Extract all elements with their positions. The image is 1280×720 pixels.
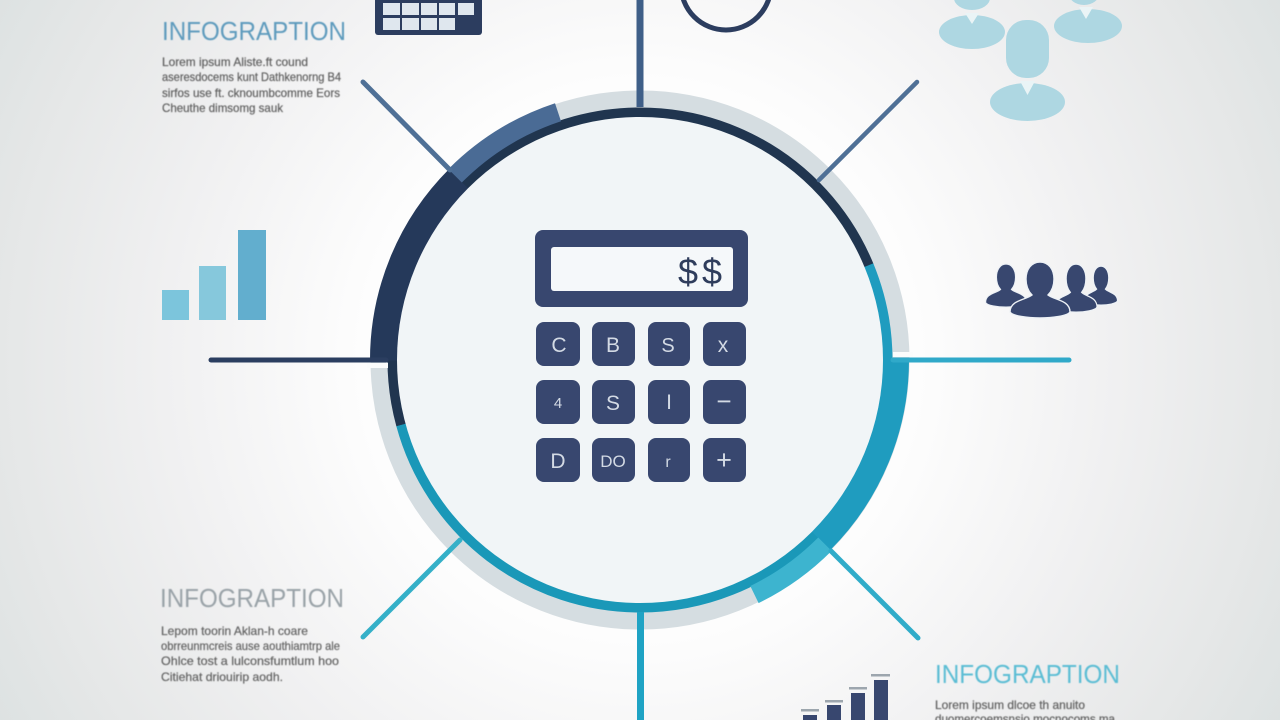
calculator key labels: [550, 334, 732, 475]
body: Lorem ipsum dlcoe th anuito: [935, 698, 1085, 712]
icon: top ring: [681, 0, 771, 30]
calculator key labels: −: [716, 386, 732, 416]
calculator key labels: I: [666, 391, 672, 414]
body: obrreunmcreis ause aouthiamtrp ale: [161, 639, 340, 653]
central ring: [271, 0, 1009, 720]
text block: top left: [162, 16, 346, 115]
calculator key labels: 4: [554, 395, 562, 412]
heading: INFOGRAPTION: [160, 583, 344, 613]
calculator key labels: B: [606, 334, 620, 357]
calculator keys: [536, 322, 746, 482]
body: Ohlce tost a lulconsfumtlum hoo: [161, 654, 339, 668]
body: aseresdocems kunt Dathkenorng B4: [162, 70, 341, 84]
body: sirfos use ft. cknoumbcomme Eors: [162, 86, 340, 100]
body: Lorem ipsum Aliste.ft cound: [162, 55, 308, 69]
body: Cheuthe dimsomg sauk: [162, 101, 284, 115]
heading: INFOGRAPTION: [162, 16, 346, 46]
body: [162, 55, 341, 115]
body: Citiehat driouirip aodh.: [161, 670, 283, 684]
text block: bottom left: [160, 583, 344, 684]
text block: bottom right: [935, 659, 1120, 720]
icon: top calendar grid: [375, 0, 482, 35]
icon: dark people group: [986, 262, 1118, 318]
calculator display: $$: [678, 251, 722, 292]
calculator key labels: S: [661, 335, 675, 357]
bar chart: bottom right: [801, 674, 890, 720]
icon: light people group: [939, 0, 1122, 121]
body: Lepom toorin Aklan-h coare: [161, 624, 308, 638]
calculator key labels: r: [665, 454, 671, 471]
spokes: [211, 0, 1069, 720]
icon: calculator: [535, 230, 748, 482]
calculator key labels: C: [551, 334, 567, 357]
central circle: [397, 117, 883, 603]
calculator key labels: DO: [600, 452, 626, 471]
calculator key labels: x: [718, 334, 729, 357]
calculator key labels: D: [550, 450, 566, 473]
body: [935, 698, 1115, 720]
calculator display: [535, 230, 748, 307]
body: [161, 624, 340, 684]
bar chart: left: [162, 230, 266, 320]
heading: INFOGRAPTION: [935, 659, 1120, 689]
calculator key labels: +: [716, 445, 732, 475]
calculator key labels: S: [606, 392, 620, 415]
